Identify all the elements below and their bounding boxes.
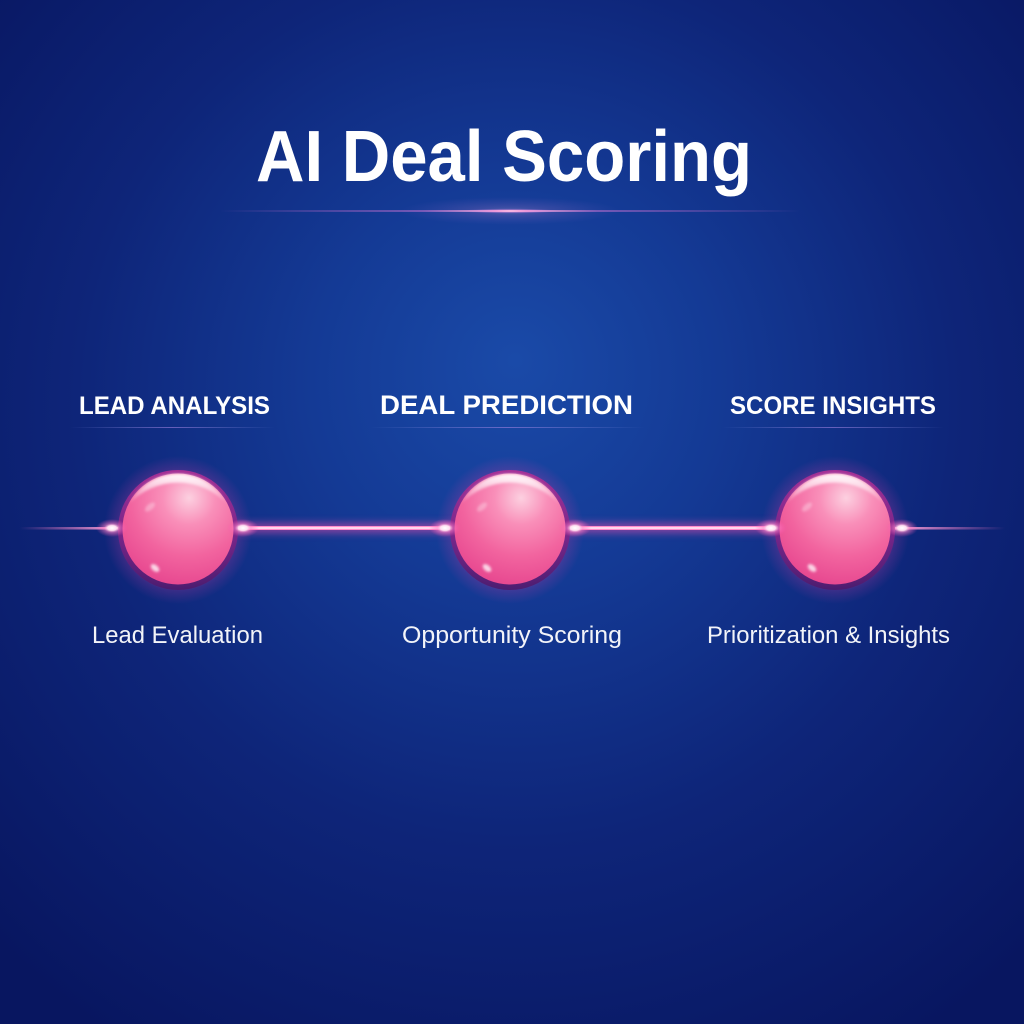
node 2: sphere (429, 456, 591, 604)
step label: Prioritization & Insights: Prioritization & Insights (707, 622, 950, 649)
connector line with glow (20, 523, 1005, 533)
step label: Opportunity Scoring: Opportunity Scoring (402, 622, 622, 649)
step label: Lead Evaluation: Lead Evaluation (92, 622, 263, 649)
title underline glow (220, 197, 800, 225)
step heading: Score Insights: SCORE INSIGHTS (730, 392, 936, 420)
step heading: Lead Analysis: LEAD ANALYSIS (79, 392, 270, 420)
title: AI Deal Scoring (256, 117, 752, 197)
node 1: sphere (96, 456, 259, 604)
step heading: Deal Prediction: DEAL PREDICTION (380, 390, 633, 420)
node 3: sphere (755, 456, 918, 604)
